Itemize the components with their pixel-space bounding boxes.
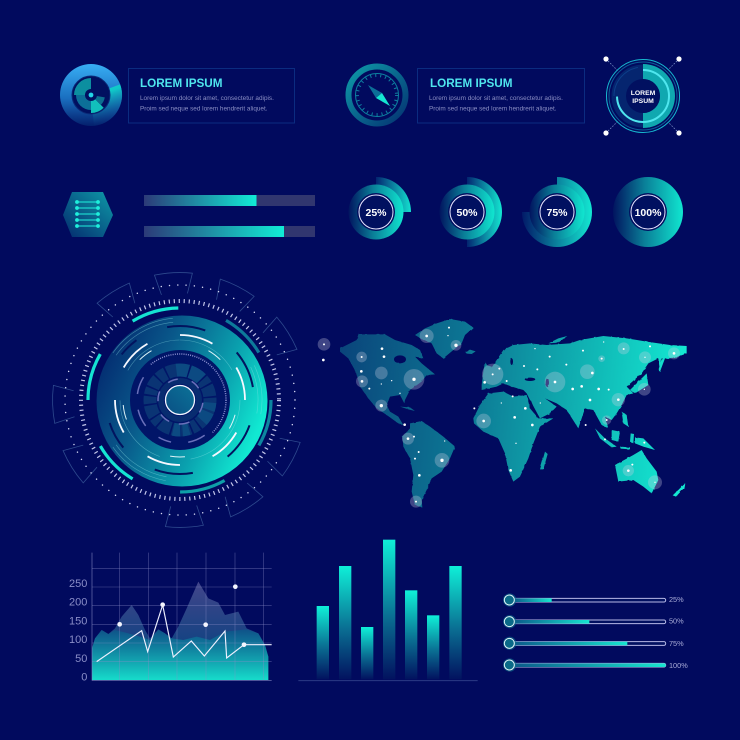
back area <box>92 582 268 680</box>
gauge: 25 percent <box>348 177 411 240</box>
data line <box>97 605 272 662</box>
slider 25 percent: 25% <box>669 595 684 604</box>
outlined small arcs <box>120 340 240 460</box>
location dots <box>322 327 675 503</box>
white arcs <box>91 311 269 489</box>
short thin arcs <box>99 319 261 481</box>
bar chart <box>298 540 478 681</box>
radial HUD dial <box>52 272 306 528</box>
text box: lorem ipsum two <box>418 68 584 123</box>
slider 75 percent <box>503 637 684 650</box>
text box: lorem ipsum one <box>128 68 294 123</box>
axis labels <box>69 578 87 683</box>
radial badge: lorem ipsum: LOREM <box>631 90 656 97</box>
radial badge: lorem ipsum <box>603 56 682 136</box>
gauge: 75 percent <box>522 177 592 247</box>
front area <box>92 629 268 680</box>
continents <box>340 319 687 508</box>
axis labels: 100 <box>69 634 87 646</box>
radial badge: lorem ipsum: IPSUM <box>632 98 654 105</box>
location halos <box>318 329 680 508</box>
icon: compass <box>348 66 406 124</box>
gauge: 100 percent: 100% <box>635 207 662 219</box>
icon: hexagon list <box>63 192 113 237</box>
outer outlined segments <box>52 272 301 528</box>
slider 100 percent <box>503 658 688 672</box>
icon: donut dial <box>59 63 123 127</box>
text box: lorem ipsum two: Proim sed neque sed lorem hendrerit aliquet. <box>429 106 557 112</box>
core ring <box>166 386 194 414</box>
axis labels: 200 <box>69 597 87 609</box>
slider 100 percent: 100% <box>669 661 688 670</box>
axis labels: 50 <box>75 653 87 665</box>
text box: lorem ipsum two: LOREM IPSUM <box>430 77 512 90</box>
infographic canvas <box>52 56 688 682</box>
text box: lorem ipsum one: LOREM IPSUM <box>140 77 222 90</box>
bright outer arcs <box>54 274 306 526</box>
core block segments <box>150 370 210 430</box>
gauge: 25 percent: 25% <box>365 207 387 219</box>
data points <box>117 584 246 647</box>
inner dark core <box>130 350 230 450</box>
world map <box>318 319 687 508</box>
gauge: 50 percent: 50% <box>456 207 478 219</box>
horizontal progress bars <box>144 195 315 237</box>
inland seas <box>394 355 549 417</box>
area and line chart <box>69 553 272 683</box>
text box: lorem ipsum two: Lorem ipsum dolor sit amet, consectetur adipis. <box>429 95 563 102</box>
panel: compass info card <box>348 66 584 124</box>
text box: lorem ipsum one: Proim sed neque sed lorem hendrerit aliquet. <box>140 106 268 112</box>
navy arcs <box>76 296 284 504</box>
axis labels: 0 <box>81 671 87 683</box>
slider 75 percent: 75% <box>669 639 684 648</box>
gauge: 100 percent <box>613 177 683 247</box>
slider list <box>503 593 688 672</box>
gauge: 50 percent <box>440 177 502 247</box>
slider 50 percent <box>503 615 684 628</box>
text box: lorem ipsum one: Lorem ipsum dolor sit amet, consectetur adipis. <box>140 95 274 102</box>
gauge: 75 percent: 75% <box>546 207 568 219</box>
axis labels: 250 <box>69 578 87 590</box>
grid <box>92 553 272 681</box>
axis labels: 150 <box>69 615 87 627</box>
dotted ring <box>150 353 227 433</box>
main teal disc <box>96 316 268 486</box>
slider 50 percent: 50% <box>669 617 684 626</box>
faint outline bands <box>66 286 294 514</box>
slider 25 percent <box>503 593 684 607</box>
panel: donut info card <box>59 63 294 127</box>
